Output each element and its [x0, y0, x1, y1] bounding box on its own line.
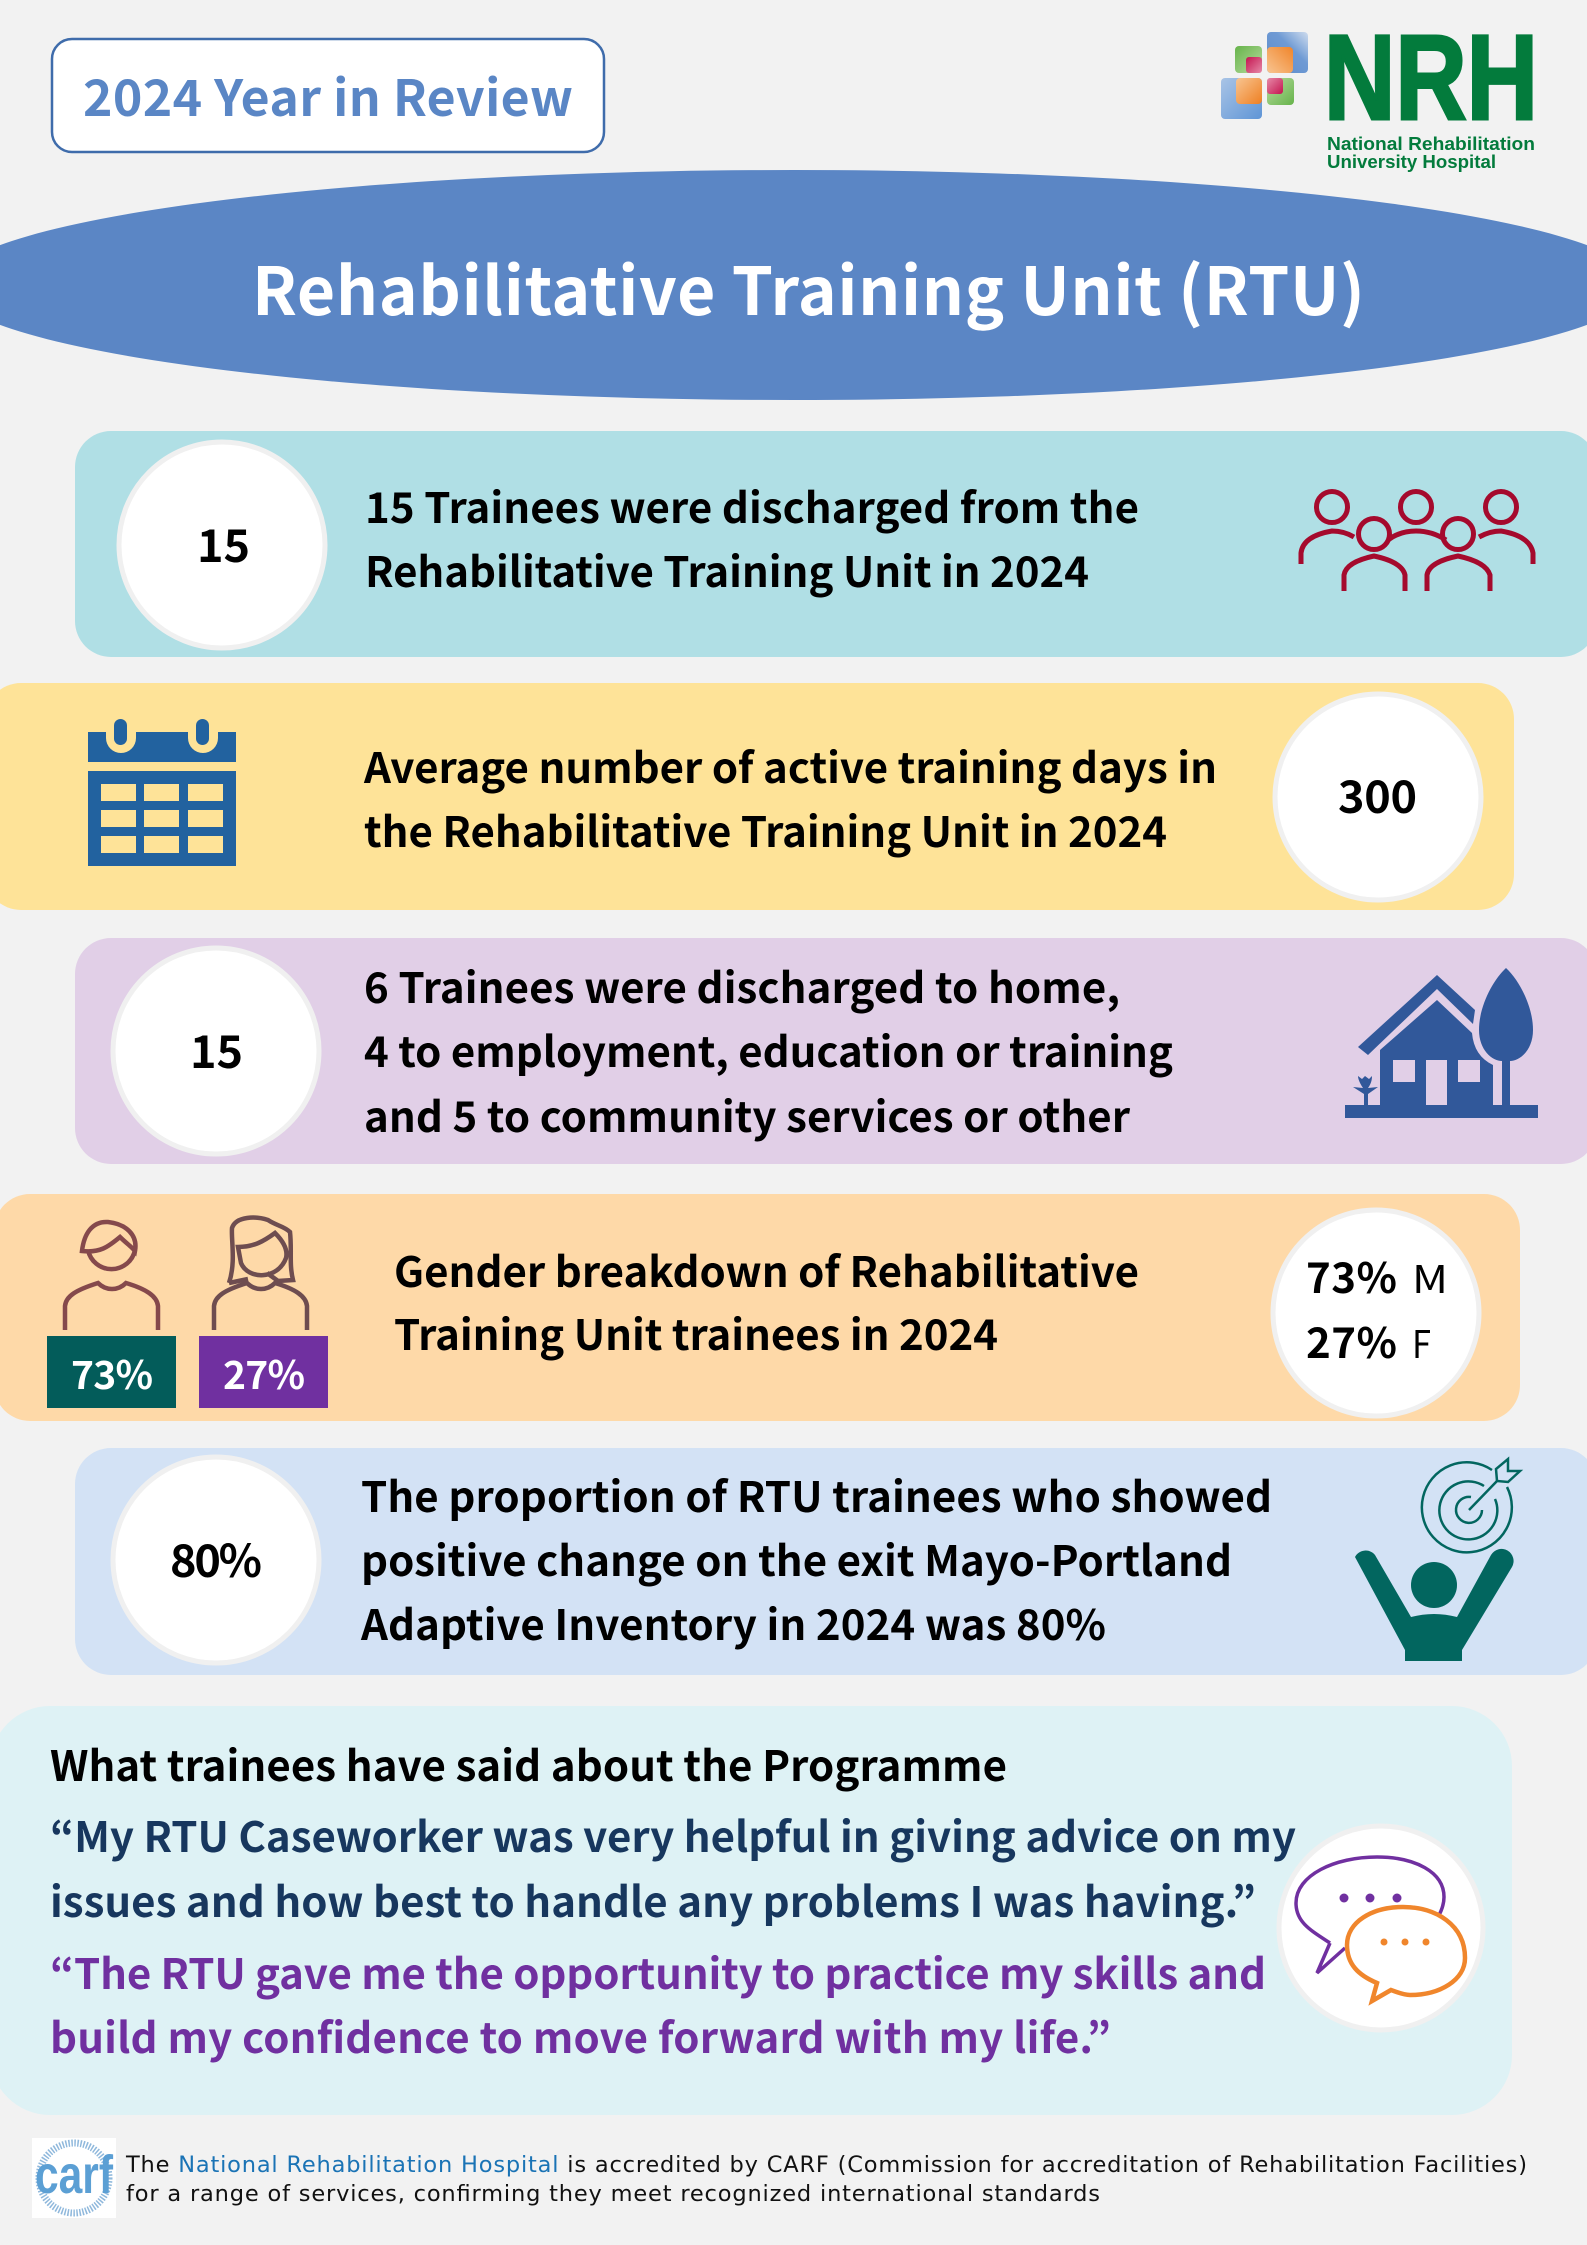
NRH logo [1221, 9, 1538, 172]
panel: active training days: 300 [1338, 761, 1417, 826]
icon: calendar [88, 719, 236, 866]
panel: discharge destinations: 4 to employment, education or training [364, 1019, 1173, 1080]
panel: trainees discharged [75, 431, 1587, 657]
panel: gender breakdown: Gender breakdown of Rehabilitative [394, 1239, 1139, 1300]
panel: positive change: Adaptive Inventory in 2024 was 80% [360, 1592, 1106, 1653]
icon: CARF logo [32, 2138, 116, 2218]
year in review heading [52, 39, 604, 152]
panel: discharge destinations: 6 Trainees were discharged to home, [364, 955, 1120, 1016]
panel: trainee quotes: “The RTU gave me the opportunity to practice my skills and [50, 1941, 1266, 2002]
panel: gender breakdown [0, 1194, 1520, 1421]
NRH logo: University Hospital [1327, 152, 1496, 172]
NRH logo: NRH [1324, 9, 1538, 145]
panel: gender breakdown: F [1412, 1314, 1431, 1369]
icon: speech bubbles [1279, 1826, 1483, 2030]
panel: trainee quotes: build my confidence to move forward with my life.” [50, 2005, 1111, 2066]
panel: discharge destinations [75, 938, 1587, 1164]
label: 27%: 27% [223, 1345, 305, 1401]
icon: CARF logo: carf [35, 2145, 114, 2205]
label: 73% [47, 1336, 176, 1408]
label: 27% [199, 1336, 328, 1408]
title banner [0, 170, 1587, 400]
year in review heading: 2024 Year in Review [83, 59, 573, 131]
icon: person and target [1355, 1459, 1520, 1661]
panel: trainee quotes: “My RTU Caseworker was very helpful in giving advice on my [50, 1804, 1296, 1865]
panel: positive change: 80% [170, 1525, 262, 1590]
panel: trainee quotes: What trainees have said about the Programme [50, 1733, 1007, 1794]
panel: positive change: positive change on the exit Mayo-Portland [361, 1528, 1232, 1589]
panel: gender breakdown: 73% [1306, 1245, 1397, 1306]
icon: group of people [1301, 492, 1533, 591]
panel: positive change: The proportion of RTU trainees who showed [361, 1464, 1272, 1525]
panel: positive change [75, 1448, 1587, 1675]
panel: gender breakdown: Training Unit trainees in 2024 [394, 1302, 998, 1363]
label: 73%: 73% [71, 1345, 153, 1401]
panel: active training days [0, 683, 1514, 910]
panel: active training days: the Rehabilitative Training Unit in 2024 [364, 799, 1167, 860]
panel: trainee quotes [0, 1706, 1512, 2115]
icon: house and tree [1345, 968, 1538, 1118]
panel: discharge destinations: 15 [190, 1016, 243, 1081]
panel: trainee quotes: issues and how best to handle any problems I was having.” [50, 1869, 1256, 1930]
footer text: for a range of services, confirming they meet recognized international standards [126, 2181, 1100, 2207]
panel: discharge destinations: and 5 to community services or other [364, 1084, 1131, 1145]
icon: male trainee [65, 1222, 158, 1330]
panel: active training days: Average number of active training days in [363, 735, 1217, 796]
footer text: The National Rehabilitation Hospital is accredited by CARF (Commission for accreditation of Rehabilitation Facilities) [125, 2152, 1527, 2178]
panel: trainees discharged: 15 Trainees were discharged from the [365, 475, 1139, 536]
panel: gender breakdown: 27% [1306, 1310, 1397, 1371]
title banner: Rehabilitative Training Unit (RTU) [252, 239, 1365, 335]
panel: trainees discharged: Rehabilitative Training Unit in 2024 [365, 539, 1089, 600]
panel: gender breakdown: M [1412, 1249, 1448, 1304]
footer text [125, 2152, 1527, 2207]
panel: trainees discharged: 15 [197, 510, 250, 575]
icon: female trainee [214, 1218, 307, 1330]
NRH logo: National Rehabilitation [1327, 134, 1535, 154]
